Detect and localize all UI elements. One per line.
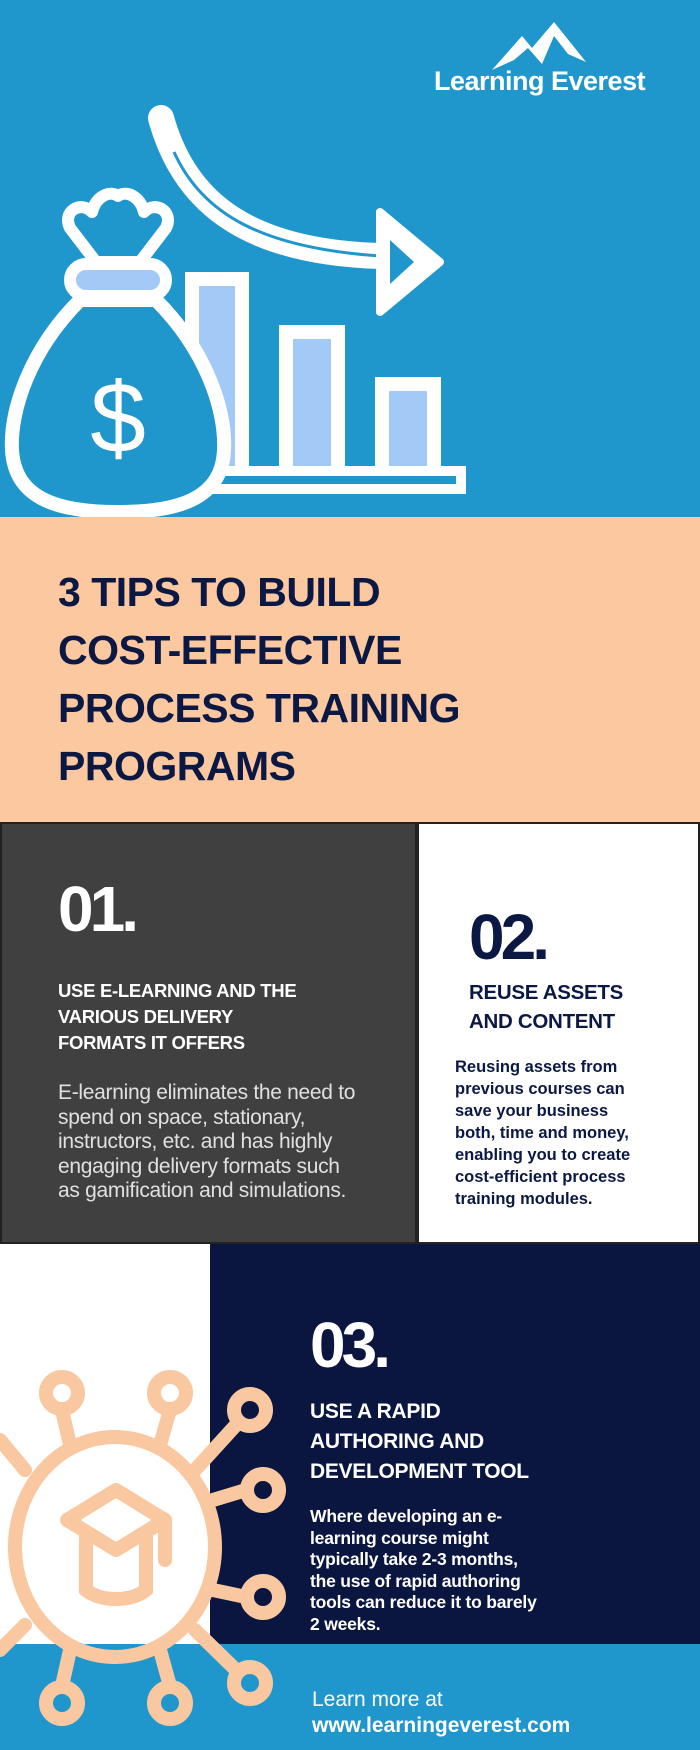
title: PROGRAMS xyxy=(58,743,295,789)
body 02: save your business xyxy=(455,1102,608,1120)
body 01 xyxy=(58,1081,355,1202)
body 01: as gamification and simulations. xyxy=(58,1179,346,1202)
footer xyxy=(0,1644,700,1750)
body 02: Reusing assets from xyxy=(455,1058,617,1076)
title: PROCESS TRAINING xyxy=(58,685,460,731)
illustration: money bag, bar chart and downward arrow xyxy=(4,105,466,517)
bars xyxy=(192,279,242,475)
body 03: 2 weeks. xyxy=(310,1614,380,1634)
number 02: 02. xyxy=(469,901,546,973)
title xyxy=(58,569,460,789)
heading 02: REUSE ASSETS xyxy=(469,981,623,1004)
money bag xyxy=(12,300,224,512)
title band xyxy=(0,517,700,822)
heading 01: VARIOUS DELIVERY xyxy=(58,1006,233,1027)
heading 03 xyxy=(310,1400,529,1483)
heading 03: DEVELOPMENT TOOL xyxy=(310,1460,529,1483)
body 02: previous courses can xyxy=(455,1080,625,1098)
body 03: Where developing an e- xyxy=(310,1506,502,1526)
number 01: 01. xyxy=(58,873,135,945)
panel: tip 02 xyxy=(417,822,700,1244)
heading 03: AUTHORING AND xyxy=(310,1430,484,1453)
body 03: the use of rapid authoring xyxy=(310,1570,521,1590)
body 03 xyxy=(310,1506,537,1634)
title: COST-EFFECTIVE xyxy=(58,627,402,673)
top hero: blue background xyxy=(0,0,700,517)
heading 01: USE E-LEARNING AND THE xyxy=(58,980,296,1001)
body 02: training modules. xyxy=(455,1190,593,1208)
body 01: spend on space, stationary, xyxy=(58,1106,305,1128)
body 02: both, time and money, xyxy=(455,1124,629,1142)
body 02: enabling you to create xyxy=(455,1146,630,1164)
body 01: E-learning eliminates the need to xyxy=(58,1081,355,1104)
logo: Learning Everest xyxy=(434,66,645,96)
arrow xyxy=(161,118,440,312)
footer text: Learn more at xyxy=(312,1688,443,1711)
heading 01 xyxy=(58,980,296,1053)
body 03: learning course might xyxy=(310,1528,489,1548)
panel: tip 03 xyxy=(210,1244,700,1644)
body 03: tools can reduce it to barely xyxy=(310,1592,537,1612)
body 01: instructors, etc. and has highly xyxy=(58,1130,332,1153)
title: 3 TIPS TO BUILD xyxy=(58,569,380,615)
body 03: typically take 2-3 months, xyxy=(310,1549,518,1569)
body 02 xyxy=(455,1058,630,1208)
illustration: money bag, bar chart and downward arrow: $ xyxy=(90,362,146,474)
footer text: www.learningeverest.com xyxy=(312,1714,570,1737)
icon: network with graduation cap xyxy=(0,1370,286,1726)
number 03: 03. xyxy=(310,1309,387,1381)
heading 02 xyxy=(469,981,623,1033)
body 02: cost-efficient process xyxy=(455,1168,626,1186)
heading 03: USE A RAPID xyxy=(310,1400,440,1423)
heading 02: AND CONTENT xyxy=(469,1010,615,1033)
logo xyxy=(434,22,646,96)
footer text xyxy=(312,1688,570,1737)
heading 01: FORMATS IT OFFERS xyxy=(58,1032,245,1053)
panel: tip 01 xyxy=(0,822,417,1244)
body 01: engaging delivery formats such xyxy=(58,1154,340,1178)
